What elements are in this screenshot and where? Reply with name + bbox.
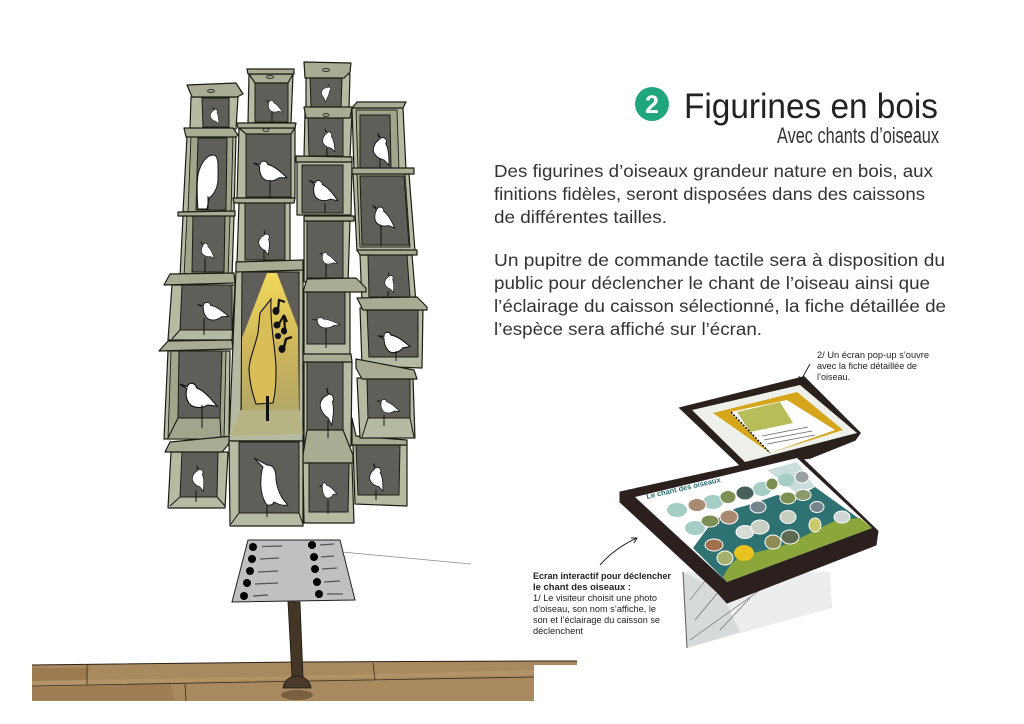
callout text: popup screen: [817, 350, 929, 382]
column 3: centre right boxes: [296, 62, 366, 523]
callout text: interactive screen: déclenchent: [533, 626, 584, 636]
lectern paragraph: [494, 250, 946, 339]
title number badge: [635, 87, 669, 121]
intro paragraph: Des figurines d’oiseaux grandeur nature en bois, aux: [494, 161, 933, 181]
connector line: [342, 552, 471, 564]
callout text: popup screen: l’oiseau.: [817, 372, 850, 382]
lectern paragraph: l’espèce sera affiché sur l’écran.: [494, 319, 762, 339]
pole base: [283, 676, 311, 688]
lectern panel: [232, 540, 355, 602]
lectern paragraph: public pour déclencher le chant de l’oiseau ainsi que: [494, 273, 930, 293]
lectern paragraph: Un pupitre de commande tactile sera à disposition du: [494, 250, 945, 270]
title number badge: 2: [645, 91, 659, 119]
callout arrow: back screen: [799, 364, 810, 382]
callout text: interactive screen: d’oiseau, son nom s’affiche, le: [533, 604, 656, 614]
floor: [32, 661, 577, 701]
bird photo ovals: [667, 471, 850, 565]
callout text: popup screen: 2/ Un écran pop-up s’ouvre: [817, 350, 929, 360]
callout text: interactive screen: Ecran interactif pour déclencher: [533, 571, 671, 581]
illustration: bird nesting boxes tower: [159, 62, 427, 526]
front touch screen: [620, 453, 878, 603]
callout text: interactive screen: [533, 571, 671, 636]
lit box with singing bird: [229, 260, 303, 526]
column 2: centre left boxes: [233, 69, 296, 262]
buttons: [240, 541, 343, 600]
yellow bird silhouette: [249, 299, 276, 404]
callout text: popup screen: avec la fiche détaillée de: [817, 361, 917, 371]
screen title: Le chant des oiseaux: [645, 475, 722, 501]
intro paragraph: finitions fidèles, seront disposées dans des caissons: [494, 184, 925, 204]
lectern paragraph: l’éclairage du caisson sélectionné, la fiche détaillée de: [494, 296, 946, 316]
column 4: right boxes: [352, 102, 427, 506]
pole: [288, 602, 303, 677]
control lectern: [232, 540, 471, 688]
callout text: interactive screen: le chant des oiseaux :: [533, 582, 631, 592]
yellow name oval: [734, 545, 754, 561]
callout text: interactive screen: son et l’éclairage du caisson se: [533, 615, 660, 625]
column 1: left boxes: [159, 83, 243, 508]
callout arrow: front screen: [600, 538, 637, 565]
sketch: interactive kiosk: [533, 350, 929, 648]
music notes: [273, 300, 292, 352]
back screen: [680, 377, 860, 465]
intro paragraph: [494, 161, 933, 227]
title: Figurines en bois: [684, 87, 938, 126]
subtitle: Avec chants d’oiseaux: [777, 123, 939, 148]
intro paragraph: de différentes tailles.: [494, 207, 667, 227]
callout text: interactive screen: 1/ Le visiteur choisit une photo: [533, 593, 657, 603]
pedestal: [683, 572, 832, 648]
